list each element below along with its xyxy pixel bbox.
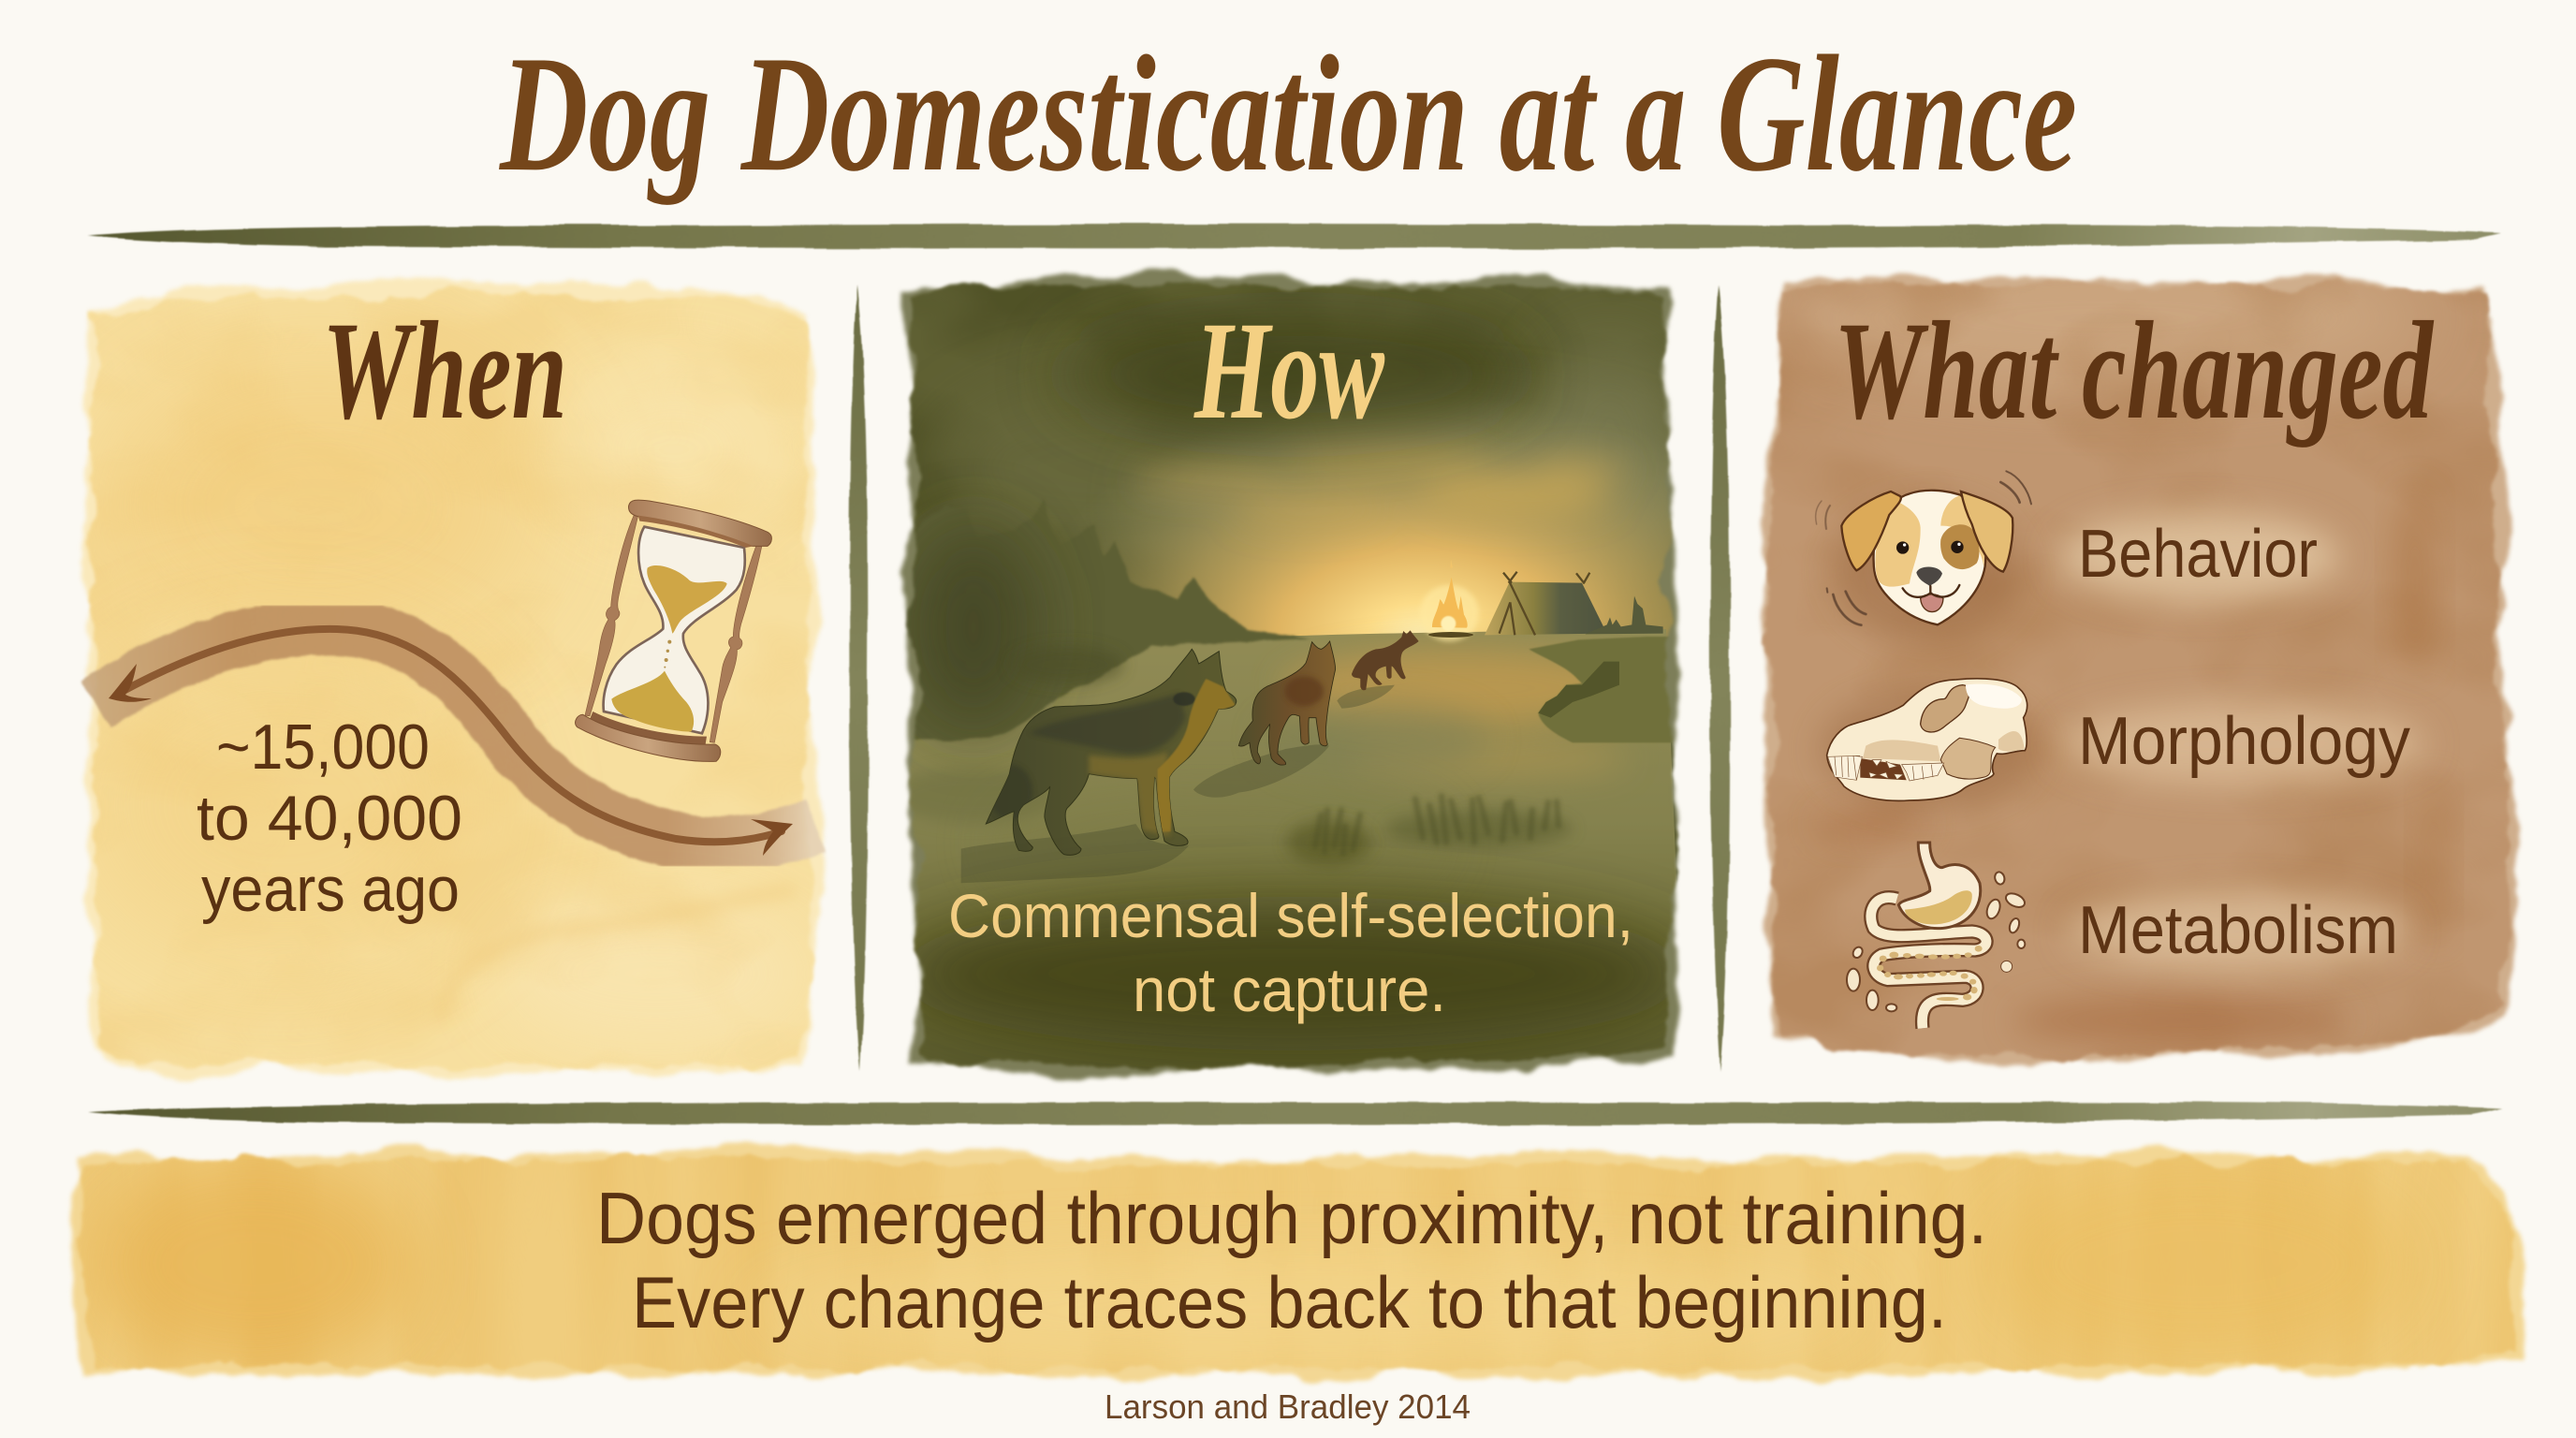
banner outer wash <box>71 1148 2522 1376</box>
when heading: When <box>322 293 567 448</box>
sunset glow <box>1099 428 1676 637</box>
what changed mottled wash <box>1741 253 2527 1086</box>
takeaway banner <box>56 1142 2546 1395</box>
what changed labels <box>2078 517 2410 968</box>
forest silhouette <box>899 499 1310 740</box>
icon shadows <box>1821 501 2036 807</box>
how caption: Commensal self-selection, <box>948 881 1633 950</box>
tent <box>1485 572 1607 635</box>
dark olive sky wash <box>907 281 1681 888</box>
when panel mottled wash <box>84 285 816 1073</box>
right arrowhead <box>751 819 793 856</box>
what changed labels: Morphology <box>2078 704 2410 779</box>
bottom divider brush stroke <box>88 1102 2503 1124</box>
how panel scene <box>889 262 1713 1086</box>
shadows and wolves <box>961 630 1419 883</box>
when date text <box>197 712 462 925</box>
how heading: How <box>1193 293 1385 448</box>
ground <box>908 629 1676 985</box>
banner text: Every change traces back to that beginning. <box>632 1261 1947 1343</box>
panel: how <box>889 262 1713 1086</box>
icon: skull <box>1827 679 2027 800</box>
timeline ribbon arrow <box>95 627 816 856</box>
left vertical divider <box>850 286 868 1072</box>
top divider brush stroke <box>88 225 2501 248</box>
food pellets <box>1847 871 2027 1011</box>
text vignettes <box>889 897 1694 1050</box>
what changed outer wash <box>1762 278 2513 1062</box>
when date text: years ago <box>201 854 460 925</box>
icon: digestive system <box>1847 843 2027 1028</box>
big wolf <box>986 649 1237 855</box>
banner wash <box>56 1142 2546 1395</box>
banner text: Dogs emerged through proximity, not training. <box>596 1177 1987 1259</box>
panel: when <box>56 262 842 1086</box>
middle wolf <box>1238 641 1336 765</box>
right bank <box>1420 559 1678 742</box>
what changed labels: Metabolism <box>2078 893 2398 968</box>
right vertical divider <box>1710 286 1730 1072</box>
hourglass icon <box>576 500 771 761</box>
when date text: ~15,000 <box>216 712 430 783</box>
grass tufts <box>1287 796 1573 865</box>
how caption: not capture. <box>1133 955 1446 1024</box>
label halos <box>2059 512 2424 971</box>
when panel outer pale wash <box>85 283 818 1075</box>
panel: what changed <box>1741 253 2527 1086</box>
cloud streaks <box>1133 449 1629 525</box>
foreground left hill <box>889 768 1058 824</box>
how panel outer wash <box>906 277 1677 1075</box>
left arrowhead <box>109 664 152 702</box>
small wolf <box>1352 630 1419 690</box>
campfire <box>1420 559 1479 641</box>
what changed labels: Behavior <box>2078 517 2318 592</box>
when date text: to 40,000 <box>197 783 462 854</box>
citation: Larson and Bradley 2014 <box>1105 1387 1471 1426</box>
banner text <box>596 1177 1987 1343</box>
how caption <box>948 881 1633 1024</box>
icon: dog face <box>1816 471 2031 625</box>
wolf shadows <box>961 685 1395 883</box>
